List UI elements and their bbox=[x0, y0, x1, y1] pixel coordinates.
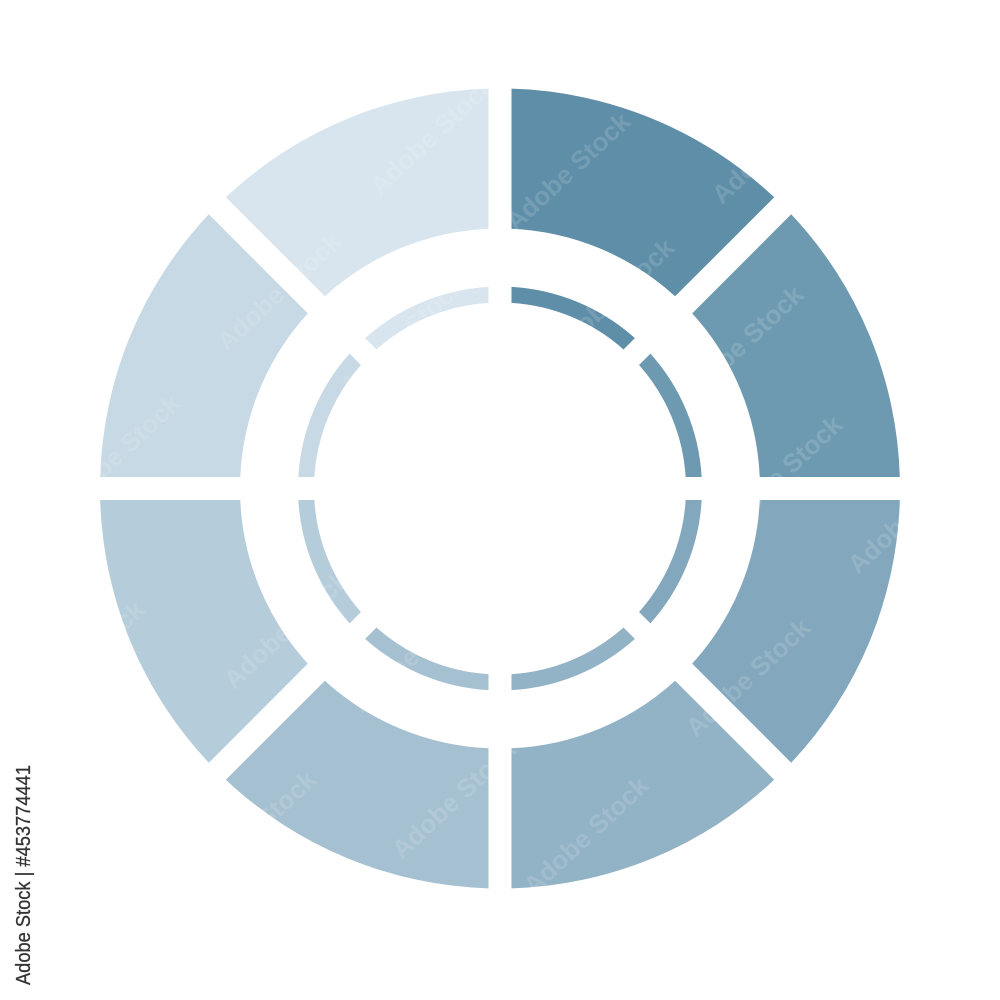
stock watermarks: Adobe Stock bbox=[211, 226, 348, 357]
segment 7 left upper bbox=[100, 214, 308, 477]
stock watermarks: Adobe Stock bbox=[186, 764, 323, 895]
arc 6 left lower bbox=[298, 500, 361, 623]
stock watermarks: Adobe Stock bbox=[712, 409, 849, 540]
stock watermarks: Adobe Stock bbox=[724, 739, 861, 870]
stock watermarks: Adobe Stock bbox=[380, 398, 517, 529]
outer ring of eight segments bbox=[100, 89, 900, 888]
stock watermarks: Adobe Stock bbox=[851, 784, 988, 915]
stock watermarks: Adobe Stock bbox=[500, 106, 637, 237]
stock watermarks: Adobe Stock bbox=[364, 70, 501, 201]
stock watermarks: Adobe Stock bbox=[167, 96, 304, 227]
stock watermarks: Adobe Stock bbox=[14, 594, 151, 725]
stock watermarks: Adobe Stock bbox=[4, 258, 141, 389]
stock watermarks: Adobe Stock bbox=[40, 58, 177, 189]
segment 5 bottom left bbox=[226, 681, 488, 888]
inner thin ring of eight arcs bbox=[298, 287, 702, 690]
stock watermarks: Adobe Stock bbox=[829, 116, 966, 247]
segment 3 right lower bbox=[692, 500, 900, 763]
stock watermarks: Adobe Stock bbox=[346, 588, 483, 719]
arc 8 top left bbox=[365, 287, 488, 349]
stock watermarks: Adobe Stock bbox=[218, 564, 355, 695]
segment 1 top right bbox=[512, 89, 774, 296]
arc 1 top right bbox=[512, 287, 635, 349]
arc 2 right upper bbox=[639, 354, 702, 477]
segment 4 bottom right bbox=[512, 681, 774, 888]
stock watermarks: Adobe Stock bbox=[544, 232, 681, 363]
stock watermarks: Adobe Stock bbox=[508, 438, 645, 569]
stock watermarks: Adobe Stock bbox=[518, 770, 655, 901]
stock watermarks: Adobe Stock bbox=[50, 388, 187, 519]
arc 4 bottom right bbox=[512, 628, 635, 690]
stock watermarks: Adobe Stock bbox=[842, 449, 979, 580]
segment 8 top left bbox=[226, 89, 488, 296]
side credit text: Adobe Stock | #453774441 bbox=[13, 765, 35, 985]
stock watermarks: Adobe Stock bbox=[680, 612, 817, 743]
arc 5 bottom left bbox=[365, 628, 488, 690]
arc 7 left upper bbox=[298, 354, 361, 477]
segment 2 right upper bbox=[692, 214, 900, 477]
stock watermarks: Adobe Stock bbox=[706, 79, 843, 210]
segment 6 left lower bbox=[100, 500, 308, 763]
stock watermarks: Adobe Stock bbox=[386, 734, 523, 865]
stock watermarks: Adobe Stock bbox=[54, 716, 191, 847]
arc 3 right lower bbox=[639, 500, 702, 623]
stock watermarks: Adobe Stock bbox=[673, 279, 810, 410]
stock watermarks: Adobe Stock bbox=[334, 270, 471, 401]
